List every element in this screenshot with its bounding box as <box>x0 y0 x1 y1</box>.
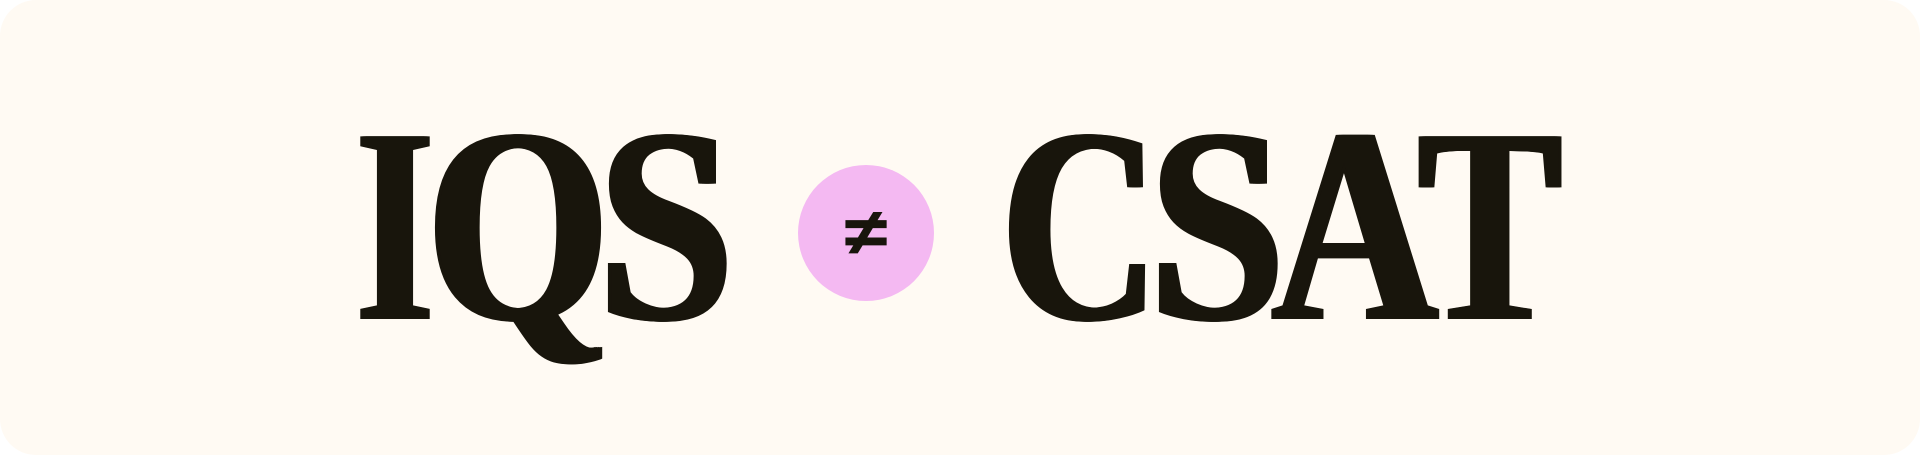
heading: CSAT: S <box>1150 71 1284 380</box>
heading: CSAT <box>1001 71 1562 380</box>
icon: not-equal badge <box>798 165 934 301</box>
heading: IQS: S <box>598 71 733 380</box>
heading: IQS <box>356 71 733 380</box>
heading: CSAT: C <box>1001 71 1158 380</box>
heading: CSAT: A <box>1272 71 1438 380</box>
icon: not-equal badge: ≠ <box>845 196 887 268</box>
heading: CSAT: T <box>1418 71 1561 380</box>
heading: IQS: Q <box>427 71 609 380</box>
heading: IQS: I <box>356 71 433 380</box>
